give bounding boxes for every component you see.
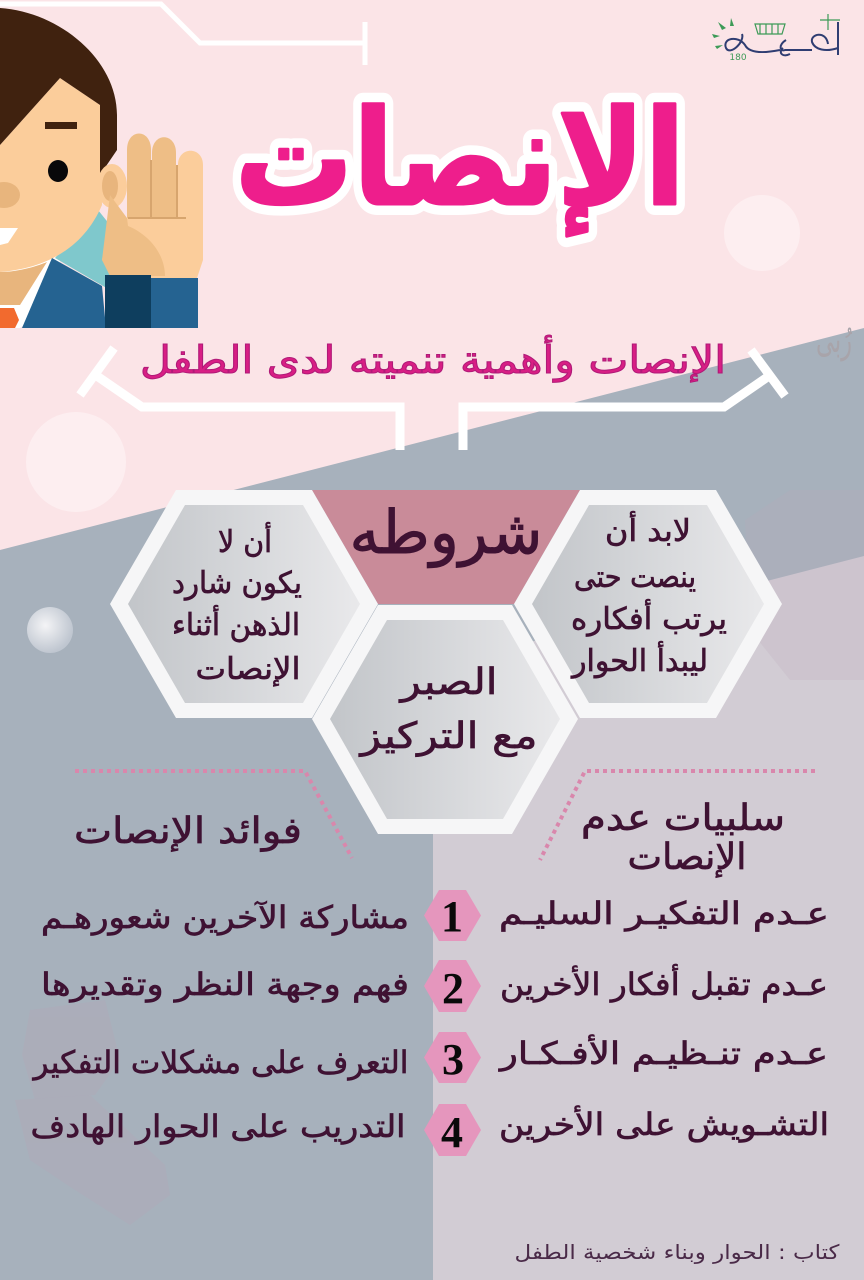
number hexagon 2 (424, 960, 481, 1013)
number hexagon 1 (424, 890, 481, 941)
left bracket (80, 348, 400, 450)
logo sun rays (712, 18, 734, 49)
bottom hexagon text: مع التركيز (358, 716, 538, 757)
left hexagon text: أن لا (218, 521, 272, 560)
logo number: 180 (729, 53, 747, 63)
illustration backdrop (0, 8, 198, 328)
right hexagon text: لابد أن (605, 510, 691, 549)
left hexagon text: يكون شارد (172, 566, 302, 601)
list: negatives (498, 896, 829, 1143)
list: benefits: التعرف على مشكلات التفكير (31, 1045, 409, 1081)
list: negatives: عـدم تنـظيـم الأفـكـار (498, 1034, 828, 1072)
right bracket (463, 350, 785, 450)
right hexagon text: ليبدأ الحوار (570, 640, 708, 679)
left hexagon text (172, 521, 302, 687)
decorative circles (26, 195, 800, 653)
heading: negatives (581, 798, 785, 878)
left hexagon (110, 490, 378, 718)
list: benefits (30, 900, 409, 1145)
list: benefits: فهم وجهة النظر وتقديرها (41, 967, 409, 1003)
right hexagon text: يرتب أفكاره (571, 598, 727, 637)
subtitle: الإنصات وأهمية تنميته لدى الطفل (140, 335, 726, 383)
right hexagon text: ينصت حتى (574, 560, 696, 595)
dotted connector left (75, 771, 352, 858)
left hexagon text: الذهن أثناء (172, 604, 300, 643)
list: negatives: التشـويش على الأخرين (499, 1105, 829, 1143)
center heading panel (312, 490, 580, 604)
logo (712, 14, 840, 63)
heading: conditions: شروطه (350, 498, 542, 568)
number hexagon 3 (424, 1032, 481, 1084)
title: الإنصات (235, 82, 685, 237)
left hexagon text: الإنصات (196, 652, 300, 687)
number hexagon 1: 1 (441, 892, 463, 941)
bottom hexagon text (358, 662, 538, 757)
number hexagon 4 (424, 1104, 481, 1157)
decorative hexagons left (15, 1000, 170, 1225)
number hexagon 4: 4 (441, 1108, 463, 1157)
logo temple (755, 14, 840, 34)
heading: negatives: الإنصات (628, 837, 746, 878)
illustration: listening boy (0, 8, 203, 328)
right hexagon text (570, 510, 727, 679)
bottom hexagon text: الصبر (398, 662, 498, 703)
list: benefits: التدريب على الحوار الهادف (30, 1109, 406, 1145)
background: grey diagonal (0, 328, 864, 1280)
heading: benefits: فوائد الإنصات (74, 811, 302, 852)
hexagon group: conditions (110, 490, 782, 834)
number hexagon 3: 3 (442, 1035, 464, 1084)
background: lavender panel (433, 556, 864, 1280)
bottom hexagon (312, 605, 578, 834)
dotted connector right (540, 771, 815, 860)
top connector line (0, 4, 365, 65)
source credit: كتاب : الحوار وبناء شخصية الطفل (514, 1240, 840, 1264)
number hexagon 2: 2 (442, 964, 464, 1013)
decorative hexagon right (745, 490, 864, 680)
list: negatives: عـدم تقبل أفكار الأخرين (500, 964, 828, 1003)
logo text (725, 22, 838, 55)
title: الإنصات (235, 82, 685, 237)
heading: negatives: سلبيات عدم (581, 798, 785, 839)
right hexagon (514, 490, 782, 718)
list: negatives: عـدم التفكيـر السليـم (499, 896, 829, 932)
list: benefits: مشاركة الآخرين شعورهـم (41, 900, 409, 936)
